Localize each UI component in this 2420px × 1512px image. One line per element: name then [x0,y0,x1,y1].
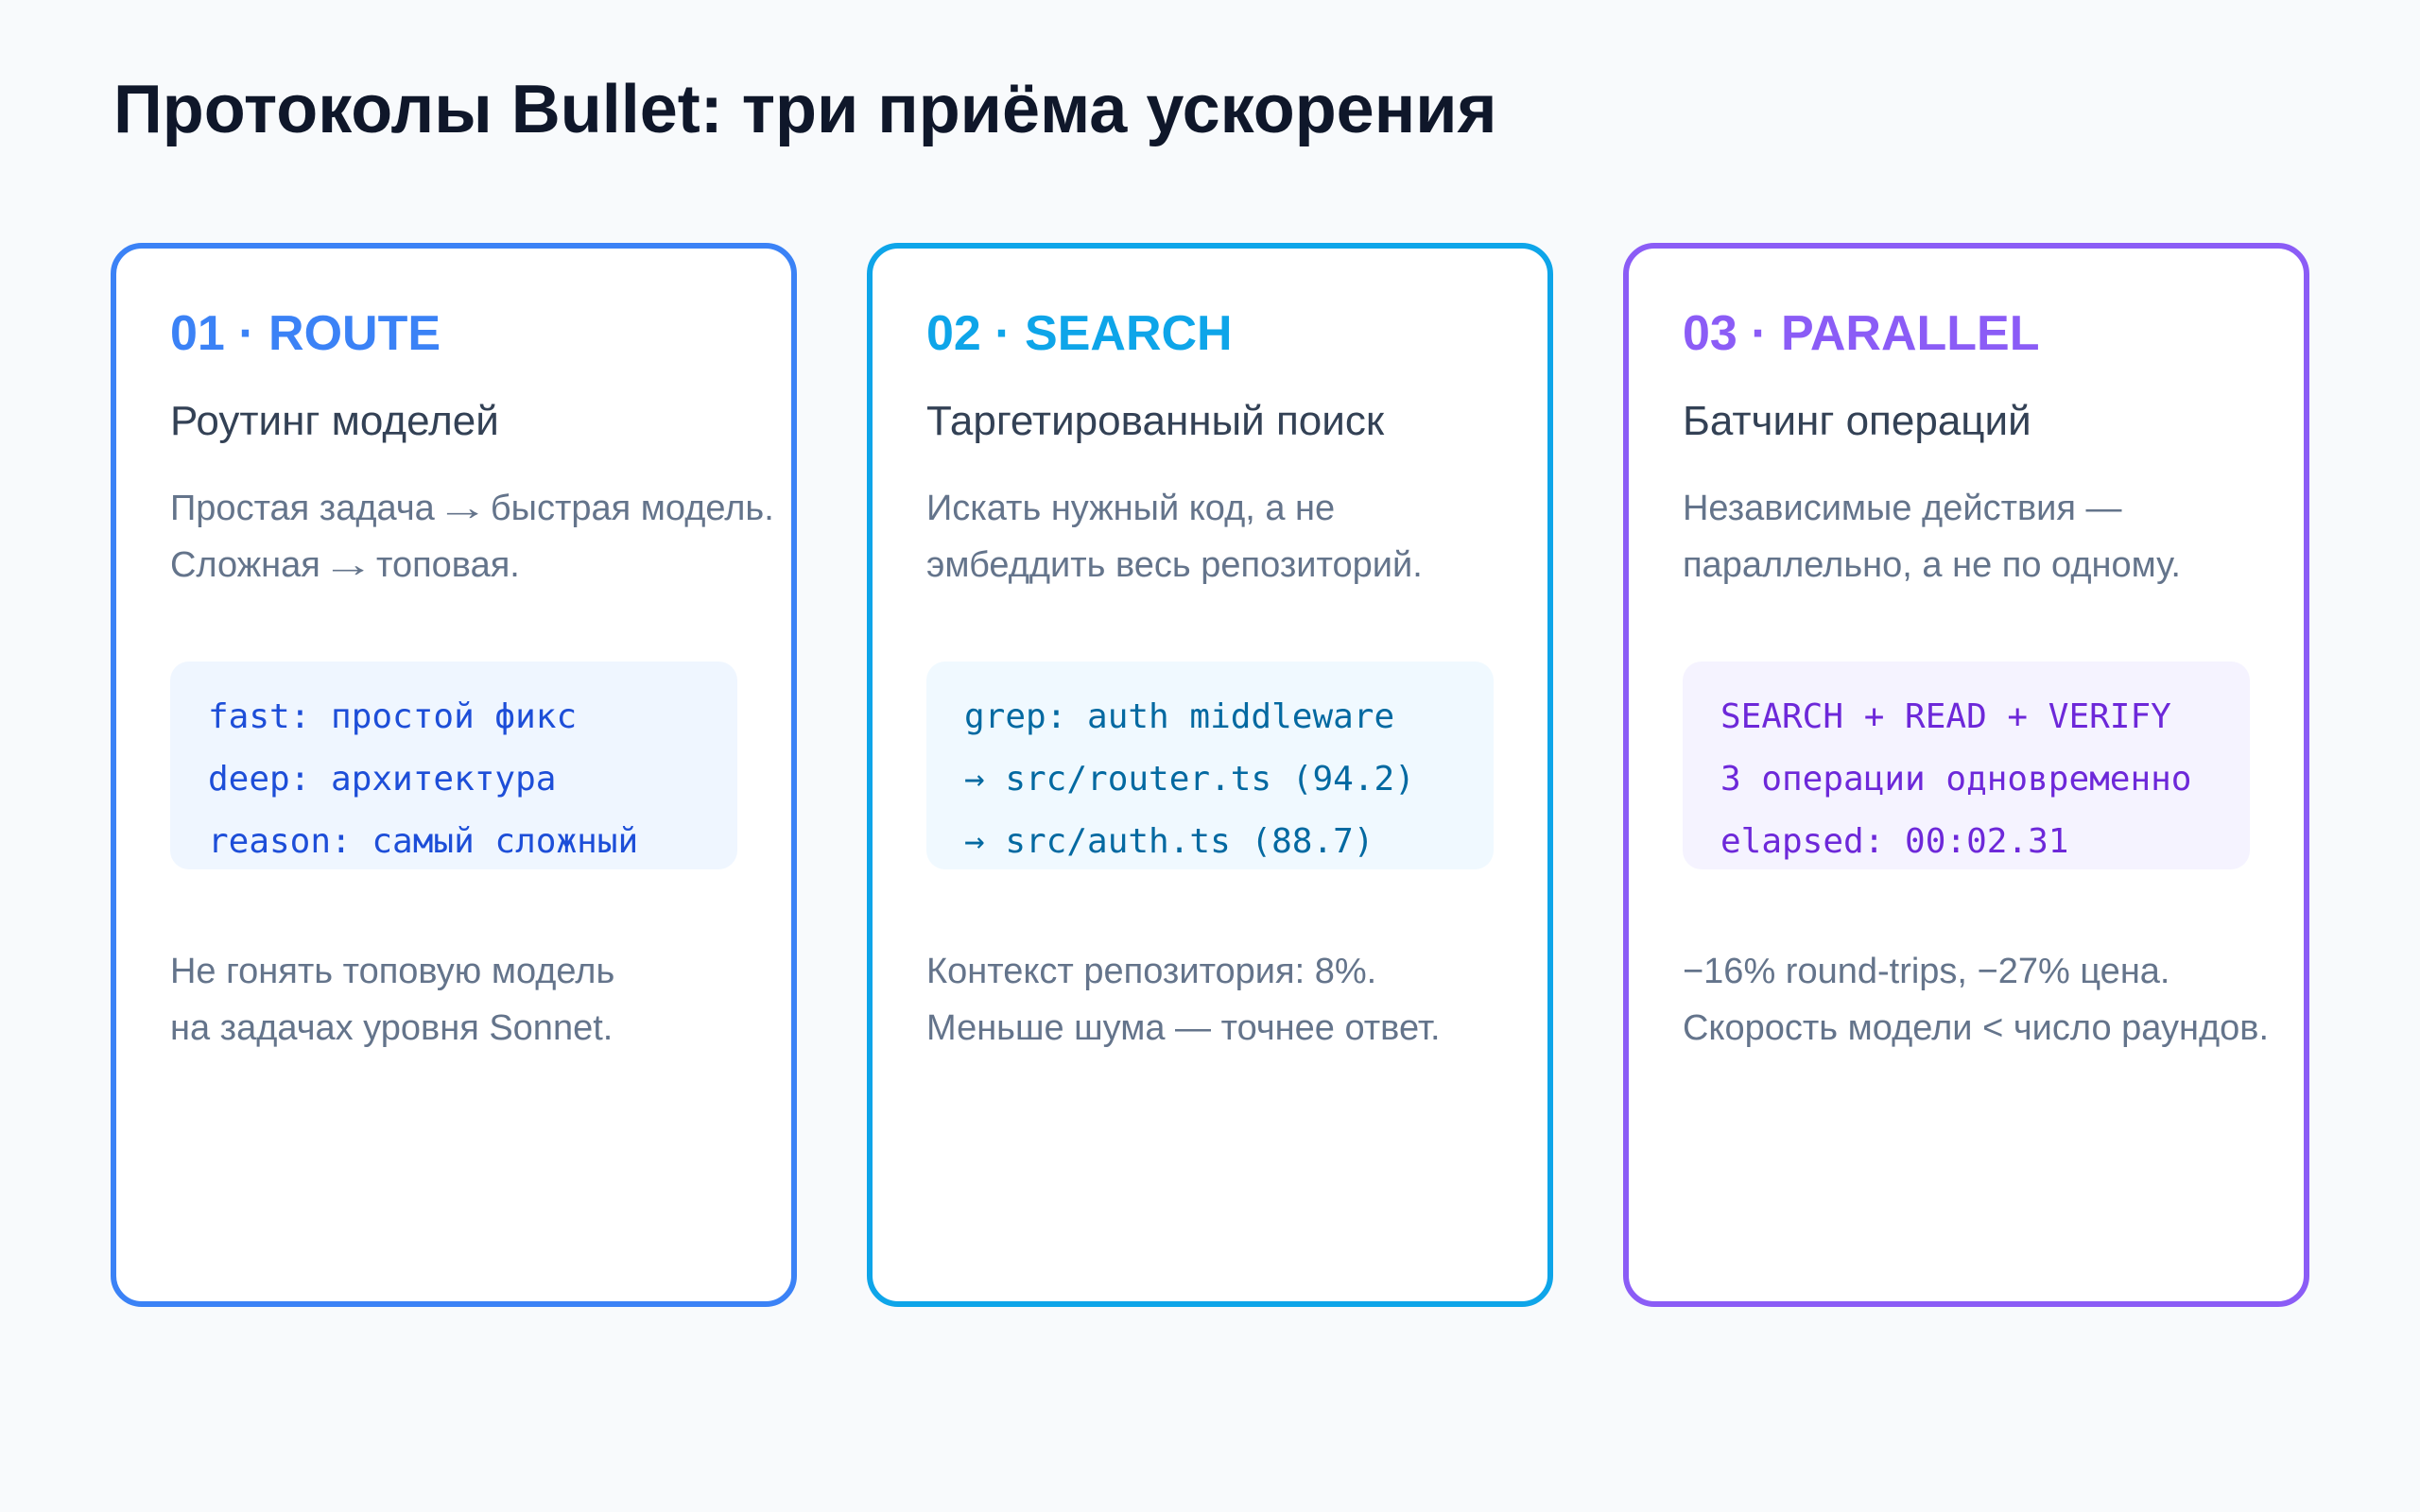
description: route: → [437,489,489,528]
description: search [926,489,1423,585]
card heading: parallel: 03 · PARALLEL [1683,306,2040,361]
note: parallel [1683,952,2269,1048]
note: search [926,952,1441,1048]
code block: search: grep: auth middleware [964,697,1394,735]
panel: 03 parallel [1623,243,2309,1307]
note: search: Меньше шума — точнее ответ. [926,1008,1441,1048]
code block: search: → src/auth.ts (88.7) [964,822,1374,860]
note: route: на задачах уровня Sonnet. [170,1008,613,1048]
code block: search: → src/router.ts (94.2) [964,760,1415,798]
description: parallel: Независимые действия — [1683,489,2122,528]
description: route [170,489,774,585]
panel: 02 search [867,243,1553,1307]
description: search: эмбеддить весь репозиторий. [926,545,1423,585]
description: route: Сложная топовая. [170,545,520,585]
note: parallel: −16% round-trips, −27% цена. [1683,952,2170,991]
code block: parallel: elapsed: 00:02.31 [1720,822,2068,860]
note: route [170,952,614,1048]
code block: route: deep: архитектура [208,760,556,798]
note: search: Контекст репозитория: 8%. [926,952,1376,991]
note: parallel: Скорость модели < число раундов. [1683,1008,2269,1048]
card heading: search: 02 · SEARCH [926,306,1233,361]
description: route: Простая задача быстрая модель. [170,489,774,528]
description: search: Искать нужный код, а не [926,489,1335,528]
title: Протоколы Bullet: три приёма ускорения [113,72,1496,147]
code block: parallel: 3 операции одновременно [1720,760,2191,798]
panel: 01 route [111,243,797,1307]
description: route: → [322,545,374,585]
note: route: Не гонять топовую модель [170,952,614,991]
code block: parallel [1683,662,2250,869]
card subtitle: route: Роутинг моделей [170,398,499,444]
code block: route: fast: простой фикс [208,697,577,735]
code block: route [170,662,737,869]
description: parallel: параллельно, а не по одному. [1683,545,2181,585]
code block: route: reason: самый сложный [208,822,638,860]
description: parallel [1683,489,2181,585]
card subtitle: search: Таргетированный поиск [926,398,1384,444]
card heading: route: 01 · ROUTE [170,306,441,361]
code block: parallel: SEARCH + READ + VERIFY [1720,697,2171,735]
code block: search [926,662,1494,869]
card subtitle: parallel: Батчинг операций [1683,398,2031,444]
